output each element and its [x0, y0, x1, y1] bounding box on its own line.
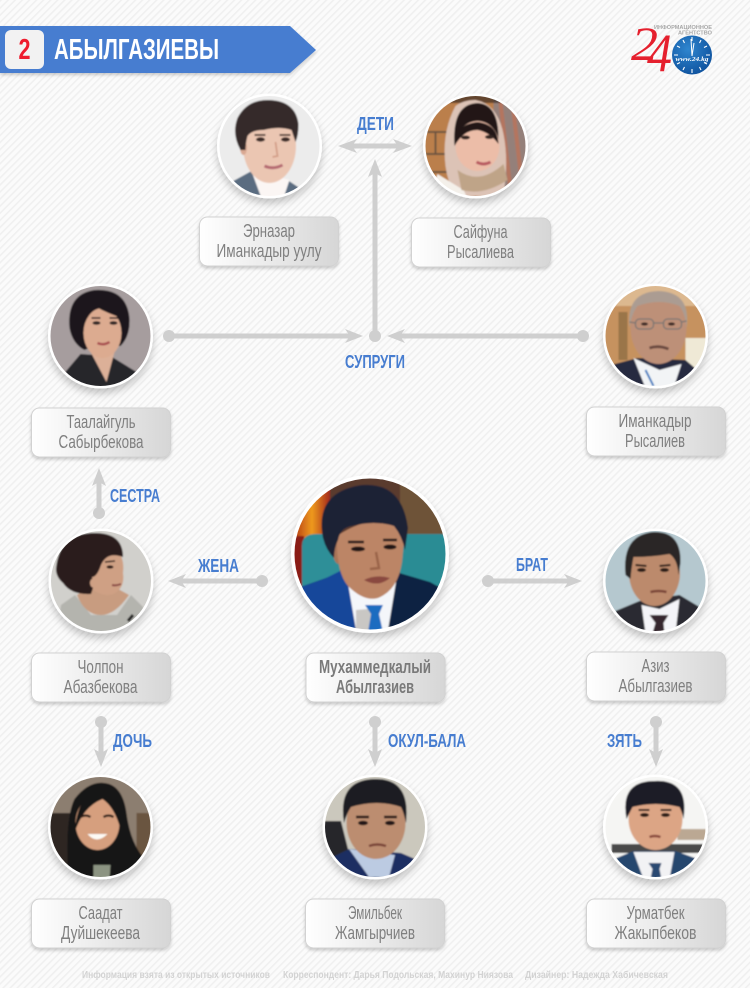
name label: Таалайгуль: Таалайгуль	[66, 412, 136, 432]
arrow: wife	[168, 574, 268, 588]
relation label: дочь: ДОЧЬ	[113, 731, 152, 751]
name label: Чолпон	[32, 653, 170, 702]
name label: Эмильбек: Жамгырчиев	[335, 923, 415, 943]
title banner: АБЫЛГАЗИЕВЫ	[54, 34, 219, 66]
name label: Урматбек	[586, 899, 726, 948]
arrow: between children	[338, 139, 412, 153]
name label: Чолпон: Чолпон	[78, 657, 124, 677]
name label: Сайфуна: Сайфуна	[454, 222, 508, 242]
logo: 24.kg	[631, 18, 713, 83]
relation label: жена: ЖЕНА	[197, 556, 239, 576]
name label: Эрназар	[200, 217, 338, 266]
name label: Иманкадыр: Иманкадыр	[618, 411, 692, 431]
relation label: окул-бала: ОКУЛ-БАЛА	[388, 731, 466, 751]
arrow: Иманкадыр to spouses	[387, 329, 589, 343]
name label: Саадат: Саадат	[78, 903, 122, 923]
arrow: spouses to children	[368, 159, 382, 342]
name label: Эрназар: Иманкадыр уулу	[216, 241, 322, 261]
name label: Мухаммедкалый: Мухаммедкалый	[319, 657, 431, 677]
portrait: Эмильбек	[322, 774, 428, 880]
logo: 24.kg: www.24.kg	[676, 56, 709, 63]
arrow: adopted son	[368, 716, 382, 767]
person: Эмильбек Жамгырчиев	[306, 774, 444, 948]
name label: Азиз: Абылгазиев	[618, 676, 692, 696]
portrait: Сайфуна	[423, 94, 530, 198]
title banner	[0, 26, 316, 73]
logo: 24.kg: ИНФОРМАЦИОННОЕ	[654, 25, 713, 31]
logo: 24.kg: 2	[631, 18, 658, 71]
relation label: супруги: СУПРУГИ	[345, 352, 405, 372]
person: Иманкадыр Рысалиев	[586, 284, 726, 456]
name label: Мухаммедкалый: Абылгазиев	[336, 677, 414, 697]
portrait: Урматбек	[603, 774, 708, 880]
person: Саадат Дуйшекеева	[32, 774, 170, 948]
relation label: брат: БРАТ	[516, 555, 548, 575]
name label: Азиз: Азиз	[642, 656, 670, 676]
person: Эрназар Иманкадыр уулу	[200, 94, 338, 266]
person: Урматбек Жакыпбеков	[586, 774, 726, 948]
logo: 24.kg: АГЕНТСТВО	[678, 30, 712, 36]
person: Азиз Абылгазиев	[586, 528, 726, 701]
name label: Эмильбек: Эмильбек	[348, 903, 402, 923]
logo: 24.kg: 4	[647, 23, 672, 83]
portrait: Азиз	[603, 528, 708, 634]
arrow: daughter	[94, 716, 108, 767]
name label: Урматбек: Урматбек	[626, 903, 685, 923]
portrait: Иманкадыр	[603, 284, 708, 388]
portrait: Саадат	[48, 774, 153, 880]
name label: Саадат	[32, 899, 170, 948]
person: Таалайгуль Сабырбекова	[32, 284, 170, 457]
portrait: Эрназар	[217, 94, 322, 198]
relation label: сестра: СЕСТРА	[110, 486, 160, 506]
name label: Таалайгуль: Сабырбекова	[58, 432, 144, 452]
name label: Сайфуна	[412, 218, 550, 267]
footer credits	[82, 969, 668, 981]
name label: Иманкадыр	[586, 407, 726, 456]
name label: Урматбек: Жакыпбеков	[614, 923, 696, 943]
name label: Эмильбек	[306, 899, 444, 948]
arrow: brother	[482, 574, 582, 588]
title banner: 2	[18, 34, 30, 66]
arrow: sister	[92, 468, 106, 519]
footer credits: Информация взята из открытых источников	[82, 969, 270, 981]
footer credits: Дизайнер: Надежда Хабичевская	[525, 969, 668, 981]
name label: Чолпон: Абазбекова	[64, 677, 138, 697]
name label: Иманкадыр: Рысалиев	[625, 431, 685, 451]
person: Чолпон Абазбекова	[32, 528, 170, 702]
arrow: son-in-law	[649, 716, 663, 767]
portrait: Таалайгуль	[48, 284, 153, 388]
name label: Азиз	[586, 652, 726, 701]
person: Сайфуна Рысалиева	[412, 94, 550, 267]
person: Мухаммедкалый Абылгазиев	[290, 475, 450, 702]
footer credits: Корреспондент: Дарья Подольская, Махинур Ниязова	[283, 969, 513, 981]
name label: Эрназар: Эрназар	[243, 221, 295, 241]
relation label: зять: ЗЯТЬ	[607, 731, 642, 751]
name label: Саадат: Дуйшекеева	[61, 923, 141, 943]
name label: Мухаммедкалый	[306, 653, 445, 702]
portrait: Чолпон	[48, 528, 154, 634]
name label: Сайфуна: Рысалиева	[447, 242, 515, 262]
portrait: Мухаммедкалый	[290, 475, 450, 633]
arrow: Таалайгуль to spouses	[163, 329, 363, 343]
relation label: дети: ДЕТИ	[357, 114, 394, 134]
name label: Таалайгуль	[32, 408, 170, 457]
